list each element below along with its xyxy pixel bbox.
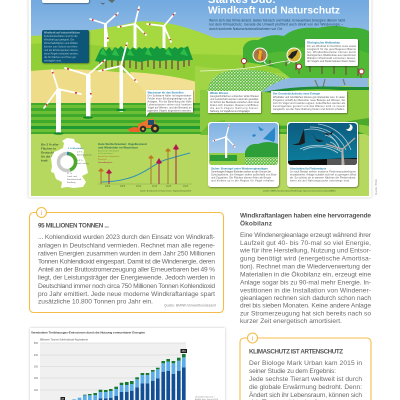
callout: dark info box: Kulturlandschaften sind für die <box>44 35 78 38</box>
callout: forest conversion: Ausgleich für die geschlagenen Bäume <box>307 48 357 51</box>
panel: bat protection: wenn sie auf Nahrungssuche unterwegs sind. <box>290 180 350 182</box>
callout body: liegt, der Leistungsträger der Energiewende. Jedoch werden in <box>38 275 215 282</box>
turbine: front left <box>44 70 81 135</box>
callout body: zusätzliche 10.800 Tonnen pro Jahr ein. <box>38 299 153 306</box>
callout body: Jede sechste Tierart weltweit ist durch <box>249 376 362 383</box>
text: eco balance body: Eine Windenergieanlage erzeugt während ihrer <box>240 232 372 239</box>
panel: bat protection: Abschalten für Fledermäuse <box>290 166 327 170</box>
callout: energy land: Feuchtgebiete genutzt und das Wasser wird zu neuem <box>273 105 345 108</box>
turbine: back right <box>147 13 175 48</box>
callout body <box>38 234 215 306</box>
panel: bat protection: Je nach Bedarf stehen moderne Fledermausdetektoren <box>290 170 357 174</box>
turbine: front centre <box>65 60 105 119</box>
panel: infographic poster <box>28 0 372 198</box>
icon: info circle <box>36 208 46 218</box>
callout body: Der Biologe Mark Urban kam 2015 in <box>249 360 362 367</box>
chart: turbine growth: Gute Stellschrauben: Vogelbestand <box>98 142 147 146</box>
landscape: hills and fields <box>31 21 369 196</box>
callout: protection of hunting grounds: jagenden Vögeln abgestimmt werden. <box>146 110 192 112</box>
source: bottom left: Quelle: Bundesamt für Naturschutz / Vogelzählung (2019) <box>140 190 191 192</box>
heading: eco balance: Windkraftanlagen haben eine hervorragende <box>240 212 371 220</box>
heading: eco balance: Ökobilanz <box>240 218 273 227</box>
callout body: anlagen in Deutschland vermieden. Rechnet man alle regene- <box>38 242 215 249</box>
map: Germany with donut chart <box>51 138 92 188</box>
map: Germany with donut chart: Siedlung <box>67 182 76 184</box>
callout: forest conversion <box>305 39 358 66</box>
callout body: pro Jahr emittiert. Jede neue moderne Windkraftanlage spart <box>38 291 215 298</box>
chart plot: 200 <box>34 377 39 380</box>
icon: info circle: i <box>41 211 42 217</box>
callout: forest conversion: her. Windkraftbetreiber können durch <box>307 51 357 54</box>
map: Germany with donut chart: noch verfüg- <box>77 162 89 165</box>
callout: wild meadows: Wilder Wiesen <box>210 91 229 95</box>
icon: info circle: i <box>252 336 253 342</box>
panel: avoided emissions chart <box>30 328 225 400</box>
graphic credit: Quelle: BWE <box>374 179 378 195</box>
flower meadow <box>207 70 287 92</box>
forest: conifer plantation <box>95 46 193 70</box>
callout: energy land: sich für Vögel und Insekten eignen. Ackerflächen werden als <box>273 102 346 105</box>
turbine: back centre <box>118 7 146 48</box>
source: bottom right: Quellen: BMWK, Bundesverband WindEnergie, Naturschutzbund Deutschland (NABU) <box>263 190 336 192</box>
map: Germany with donut chart: Bereits genutzt <box>77 154 92 156</box>
callout: forest conversion: Für ein Windrad im Nutzforst muss etwas <box>307 45 357 48</box>
callout: wild meadows: finden sich Insekten, Raupen und Blüten, <box>210 104 259 107</box>
sky <box>31 0 369 38</box>
icon: tractor <box>128 119 159 133</box>
chart: turbine growth: Anzahl der Vogelarten <box>98 155 120 158</box>
callout: dark info box: Windkraft gut geeignet. Die <box>44 38 75 42</box>
panel: bird protection <box>208 122 279 187</box>
callout body: Ändert sich ihr Lebensraum, können sich <box>249 391 362 399</box>
callout: wild meadows: Im Schutz der Bestände zwischen dem Gras <box>210 101 260 104</box>
callout: forest conversion: der Vögeln und Fledermäusen Raum bietet. <box>307 60 356 63</box>
text: eco balance body: Anlage sogar bis zu 90-mal mehr Energie. In- <box>240 280 371 286</box>
text: share of land: für die Wind- <box>41 154 59 158</box>
icon: flying birds <box>100 0 115 4</box>
callout: climate protection <box>240 333 371 400</box>
callout: protection of hunting grounds: Felder einer Erholungsanlage um die <box>148 98 192 100</box>
callout: forest conversion: Wäldern Mischwald entstehen lassen, <box>307 57 356 60</box>
callout: forest conversion: ökologischen Waldumbau aus naturfernen <box>307 54 357 57</box>
chart plot: 300 <box>34 366 39 368</box>
map: Germany with donut chart: 97 % <box>67 173 72 175</box>
chart: turbine growth: 2005 <box>120 186 126 188</box>
map: Germany with donut chart: 1,3 % <box>77 160 83 162</box>
title: Windkraft und Naturschutz <box>208 6 340 16</box>
chart: turbine growth: 2020 <box>166 186 172 188</box>
callout: energy land <box>271 91 347 113</box>
text: eco balance body: Materialien in die Ökobilanz ein, erzeugt eine <box>240 270 371 278</box>
chart: turbine growth: 2023 <box>183 186 189 188</box>
callout: dark info box: können zum Schutz von Arten <box>44 46 78 48</box>
text: eco balance body: drei bis sieben Monaten. Keine andere Anlage <box>240 302 371 310</box>
icon: bird magnifier circle <box>253 48 267 64</box>
callout body <box>249 360 362 400</box>
callout: 95 million tonnes <box>30 208 224 312</box>
map: Germany with donut chart: 0,7 % <box>77 152 83 154</box>
chart: turbine growth: 2010 <box>136 186 142 188</box>
text: share of land: Deutschland <box>41 150 59 154</box>
stacked bars <box>93 367 186 400</box>
intro text: durch konkrete Naturschutzmaßnahmen vor Ort. <box>209 27 283 31</box>
intro text: Wenn sich das Klima ändert, leiden Mensch und Natur. Erneuerbare Energien dienen nicht <box>209 18 345 22</box>
pond <box>262 78 369 93</box>
callout: wild meadows: und Landschaft werden naturnah gestaltet. <box>210 98 259 101</box>
forest: right mixed woodland <box>200 26 369 78</box>
heading: eco balance <box>240 212 371 227</box>
chart: turbine growth: 2015 <box>152 186 158 188</box>
chart: turbine growth: Anzahl der Windräder <box>98 150 119 152</box>
panel: bat protection: einsatzbereit: Anlage schaltet sich bei zu geringem Wind <box>290 174 357 176</box>
chart source: Umweltbundesamt / <box>195 396 215 398</box>
callout: dark info box: und als Erholungsraum dienen, <box>44 49 79 52</box>
title <box>208 0 340 14</box>
chart: turbine growth: Rotmilan <box>98 158 107 161</box>
callout: protection of hunting grounds: Anlagen. Für die Bestellung der Höfe <box>148 100 192 104</box>
chart: turbine growth: in Deutschland <box>98 152 113 155</box>
text: eco balance body: gieanlagen rechnen sich dadurch schon nach <box>240 295 371 302</box>
intro text: nur dem Klimaschutz. Gerade die Umwelt profitiert auch direkt von der Windenergie – <box>209 23 343 27</box>
callout: dark info box: verträglich sind. <box>44 60 62 62</box>
value label: 2023: 259 <box>182 351 186 353</box>
chart: turbine growth <box>98 142 192 188</box>
text: eco balance body <box>239 232 372 325</box>
callout body: seiner Studie zu dem Ergebnis: <box>249 368 336 375</box>
callout: energy land: Ausgleich, wo die Tiere Nahrung finden und Schutz erhalten. <box>273 108 345 111</box>
chart plot: 500 <box>34 342 39 345</box>
chart title: Vermiedene Treibhausgas-Emissionen durch die Nutzung erneuerbarer Energien <box>31 330 145 334</box>
callout: energy land: Der Grundstücksbesitz neue Energie <box>273 92 321 96</box>
text: eco balance body: zur Stromerzeugung hat sich bereits nach so <box>240 310 371 318</box>
callout body: die globale Erwärmung bedroht. Denn: <box>249 384 362 391</box>
callout body: rativen Energien zusammen wurden in dem Jahr 250 Millionen <box>38 250 215 257</box>
chart: turbine growth: 2000 <box>105 186 111 188</box>
callout: top left white box <box>42 0 89 3</box>
icon: bird protection signs <box>242 58 364 78</box>
callout body: Anteil an der Bruttostromerzeugung aller Erneuerbaren bei 49 % <box>38 267 215 274</box>
panel: bird protection: und bleiben so in der Region für Vögel erhalten. <box>211 180 275 182</box>
text: eco balance body: tion). Rechnet man die Wiederverwertung der <box>240 264 372 270</box>
panel: bird protection: Sicher: Brutvögel unter Windenergieanlagen <box>211 166 268 170</box>
panel: bat protection <box>287 122 358 187</box>
value label: 2023 <box>180 349 187 353</box>
callout: dark info box: wenn Regeln beachtet werden, <box>44 52 79 56</box>
callout: wild meadows: die auch Vögeln Nahrung bieten. <box>210 107 259 110</box>
callout: protection of hunting grounds: Vögel auf Wiesen, und der Bestand an <box>148 106 192 110</box>
callout: energy land: Projekten schafft der Betreiber neue Biotope auf Wiesen, die <box>273 99 346 102</box>
callout heading: 95 MILLIONEN TONNEN ... <box>38 223 109 230</box>
callout: wild meadows: Nahrung zur Vogelbrut und Vogeljagd. <box>210 110 250 113</box>
text: eco balance body: kurzer Zeit energetisch amortisiert. <box>240 318 342 325</box>
callout: forest conversion: Ökologischer Waldumbau <box>307 40 340 44</box>
text: share of land: Bis 2 % aller <box>41 142 60 146</box>
text: eco balance body: Laufzeit gut 40- bis 70-mal so viel Energie, <box>240 240 371 247</box>
callout: protection of hunting grounds: Wachstum für den Bestellen <box>148 90 184 94</box>
panel: bird protection: Schutzgebiete, die Anlagen laufen außerhalb von Brut- <box>211 174 277 176</box>
panel: bird protection: und Zugzeiten. Die Flächen dienen Arten als Ersatz <box>211 176 272 180</box>
text: eco balance body: wie für ihre Herstellung, Nutzung und Entsor- <box>239 248 371 255</box>
chart plot: 400 <box>34 354 39 357</box>
callout: wild meadows: Ausgleichsflächen entstehen wilde Wiesen <box>210 95 260 98</box>
callout: dark info box: die für Flächen und Tiere gut <box>44 56 76 59</box>
callout: protection of hunting grounds <box>146 90 193 116</box>
map: Germany with donut chart: 2 % Windräder <box>68 148 83 150</box>
turbine: back left <box>90 13 118 47</box>
text: eco balance body: vestitionen in die Installation von Windener- <box>240 288 371 294</box>
callout: dark info box <box>42 30 89 63</box>
map: Germany with donut chart: Forstwirtschaft <box>67 178 82 181</box>
panel: bat protection: ab. So schützt sie in warmen Nächten die Fledermäuse, <box>290 176 356 180</box>
chart: turbine growth: Seeadlerpaare <box>98 161 113 164</box>
callout: dark info box: Wirtschaftsflächen und Wälder <box>44 42 78 45</box>
text: share of land <box>41 144 59 162</box>
chart: turbine growth: und Windräder im Wachstum <box>98 146 138 150</box>
map: Germany with donut chart: Land- und <box>67 176 78 178</box>
chart plot: 100 <box>34 389 39 392</box>
text: share of land: Flächen in <box>41 146 56 150</box>
chart plot <box>34 342 187 400</box>
callout: dark info box: Windkraft auf Industrieflächen <box>44 32 80 34</box>
callout: energy land: Windräder und Grünflächen können gut miteinander sein. In vielen <box>273 96 346 99</box>
callout: protection of hunting grounds: Der Schwarze Adler ist begrenzbarer <box>148 94 192 98</box>
callout body: Deutschland immer noch circa 750 Millionen Tonnen Kohlendioxid <box>38 283 215 290</box>
turbine: front right <box>99 43 137 112</box>
text: share of land: kraft <box>41 158 48 162</box>
callout body: ... Kohlendioxid wurden 2023 durch den Einsatz von Windkraft- <box>38 234 215 241</box>
value label: early year <box>60 397 65 400</box>
callout: wild meadows <box>208 91 261 113</box>
callout heading: KLIMASCHUTZ IST ARTENSCHUTZ <box>249 348 343 356</box>
icon: bat magnifier circle <box>287 48 301 64</box>
callout body: Tonnen Kohlendioxid eingespart. Damit ist die Windenergie, deren <box>38 258 215 266</box>
text: eco balance body: gung benötigt wird (energetische Amortisa- <box>240 256 371 262</box>
callout source: Quelle: BMWK/Umweltbundesamt <box>164 304 216 308</box>
intro text <box>209 19 345 30</box>
chart legend: Millionen Tonnen Kohlendioxid-Äquivalente <box>40 339 89 342</box>
panel: bird protection: Genehmigte Anlagen-Einheiten stehen an der Grenze der <box>211 170 271 174</box>
callout: protection of hunting grounds: Lebensräumen ziehen sich Insekten <box>148 104 192 106</box>
chart source <box>195 396 219 400</box>
